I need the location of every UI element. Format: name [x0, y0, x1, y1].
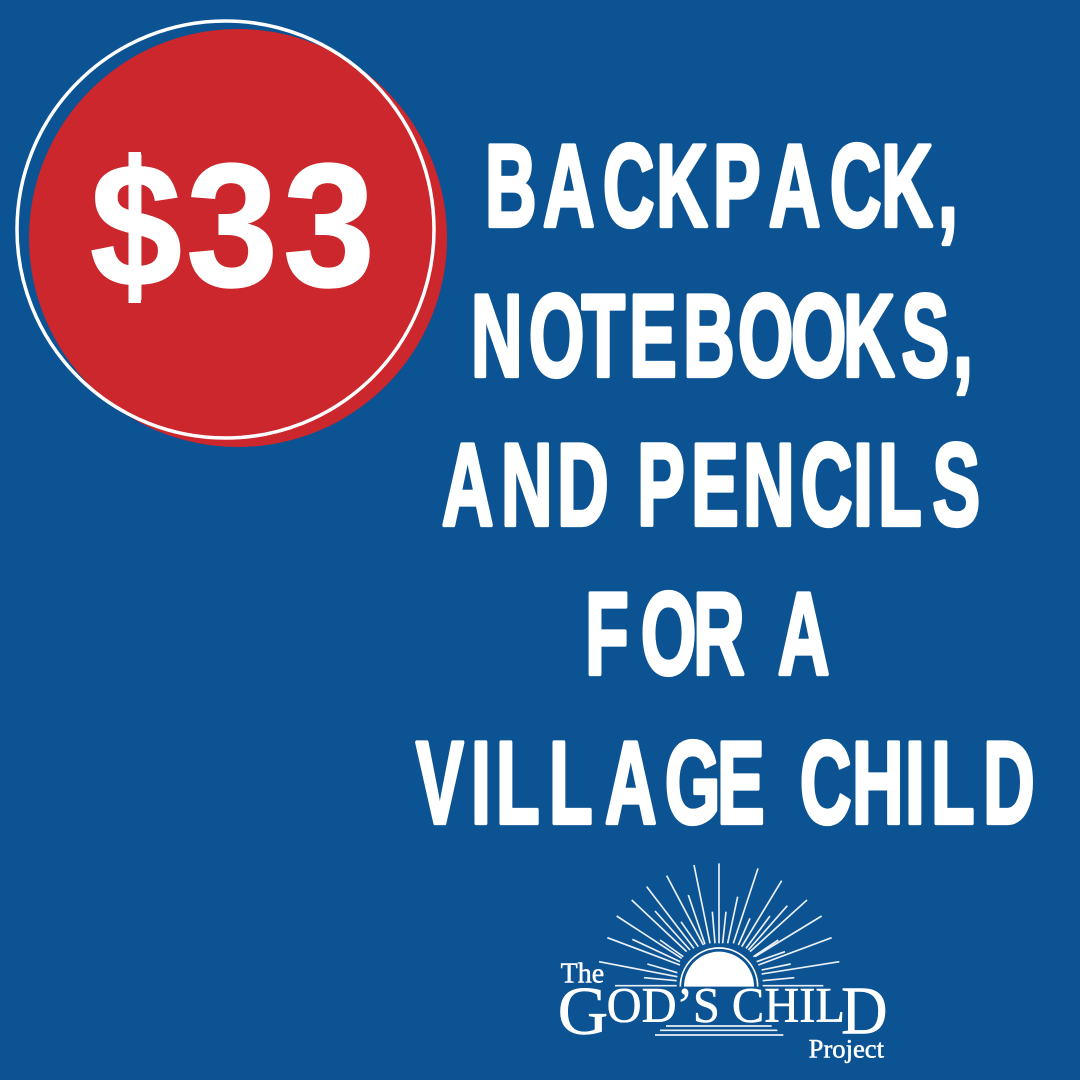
price badge: $33 — [90, 127, 375, 324]
heading: BACKPACK, — [485, 120, 958, 252]
logo wordmark: The — [561, 958, 604, 989]
logo wordmark — [558, 958, 888, 1063]
icon: sun rays — [599, 863, 839, 1035]
logo wordmark: Project — [809, 1033, 885, 1063]
heading — [416, 120, 1035, 849]
logo: The God's Child Project — [558, 863, 888, 1063]
heading: FOR A — [585, 568, 829, 700]
heading: AND PENCILS — [442, 419, 980, 551]
icon: rising sun — [680, 948, 758, 987]
heading: VILLAGE CHILD — [416, 717, 1035, 849]
logo wordmark: G — [558, 973, 608, 1049]
price badge — [17, 21, 447, 447]
logo wordmark: OD’S CHIL — [607, 977, 845, 1033]
heading: NOTEBOOKS, — [471, 270, 973, 402]
logo wordmark: D — [841, 972, 888, 1048]
